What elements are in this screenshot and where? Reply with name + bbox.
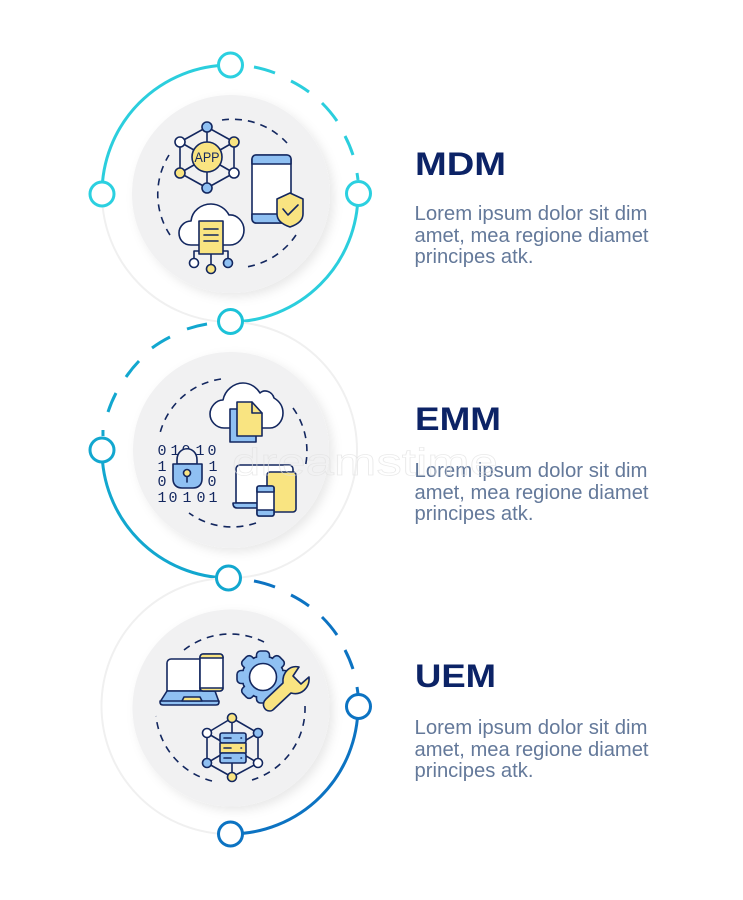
icon: cloud files <box>210 383 283 442</box>
solid arcs: MDM <box>102 65 358 322</box>
dashed arc: UEM <box>254 581 358 694</box>
text block: MDM <box>414 203 649 268</box>
text block: MDM: Lorem ipsum dolor sit dim <box>414 203 648 225</box>
gray disc: MDM <box>132 95 330 293</box>
icon: encrypted lock: 10101 <box>158 490 218 507</box>
text block: MDM: amet, mea regione diamet <box>414 225 649 247</box>
icon: encrypted lock: 01010 <box>158 443 217 460</box>
nodes: EMM <box>90 438 114 462</box>
inner dashed ring: UEM <box>156 634 305 781</box>
solid arc: EMM <box>102 450 228 578</box>
icon: encrypted lock: 0 <box>158 474 167 491</box>
heading: MDM: MDM <box>415 146 506 182</box>
icon: server network <box>202 714 262 782</box>
text block: UEM: amet, mea regione diamet <box>414 739 649 761</box>
heading: EMM: EMM <box>415 401 501 437</box>
icon: gear and wrench <box>237 651 309 711</box>
text block: UEM: principes atk. <box>414 760 534 782</box>
icon: encrypted lock: 1 <box>208 459 218 476</box>
panel: EMM <box>90 322 649 578</box>
outer ring: EMM <box>228 322 357 578</box>
icon: secure phone <box>252 155 303 227</box>
text block: EMM: amet, mea regione diamet <box>414 482 649 504</box>
text block: EMM <box>414 460 649 525</box>
text block: EMM: Lorem ipsum dolor sit dim <box>414 460 648 482</box>
text block: UEM: Lorem ipsum dolor sit dim <box>414 717 648 739</box>
inner dashed ring: EMM <box>160 379 307 527</box>
heading: UEM: UEM <box>415 658 496 694</box>
icon: laptop and phone <box>160 654 223 705</box>
panel: UEM <box>101 578 649 846</box>
inner dashed ring: MDM <box>158 119 296 267</box>
gray disc: EMM <box>133 352 329 548</box>
connector node: MDM to EMM <box>218 310 242 334</box>
icon: encrypted lock <box>158 443 218 507</box>
icon: devices <box>233 465 296 516</box>
panel: MDM <box>90 53 649 322</box>
dashed arc: MDM <box>254 67 358 180</box>
outer ring: UEM <box>101 578 231 834</box>
watermark: dreamstime <box>232 442 498 484</box>
nodes: UEM <box>218 694 370 846</box>
solid arc: UEM <box>231 707 358 834</box>
dashed arc: EMM <box>103 324 207 436</box>
text block: UEM <box>414 717 649 782</box>
icon: encrypted lock: 0 <box>208 474 217 491</box>
gray disc: UEM <box>132 610 330 806</box>
nodes: MDM <box>90 53 370 206</box>
icon: app network <box>175 122 239 193</box>
connector node: EMM to UEM <box>216 566 240 590</box>
text block: MDM: principes atk. <box>414 246 534 268</box>
icon: cloud document <box>179 204 244 274</box>
text block: EMM: principes atk. <box>414 503 534 525</box>
icon: encrypted lock: 1 <box>158 459 167 476</box>
icon: app network: APP <box>194 149 220 165</box>
outer ring: MDM <box>102 194 230 322</box>
